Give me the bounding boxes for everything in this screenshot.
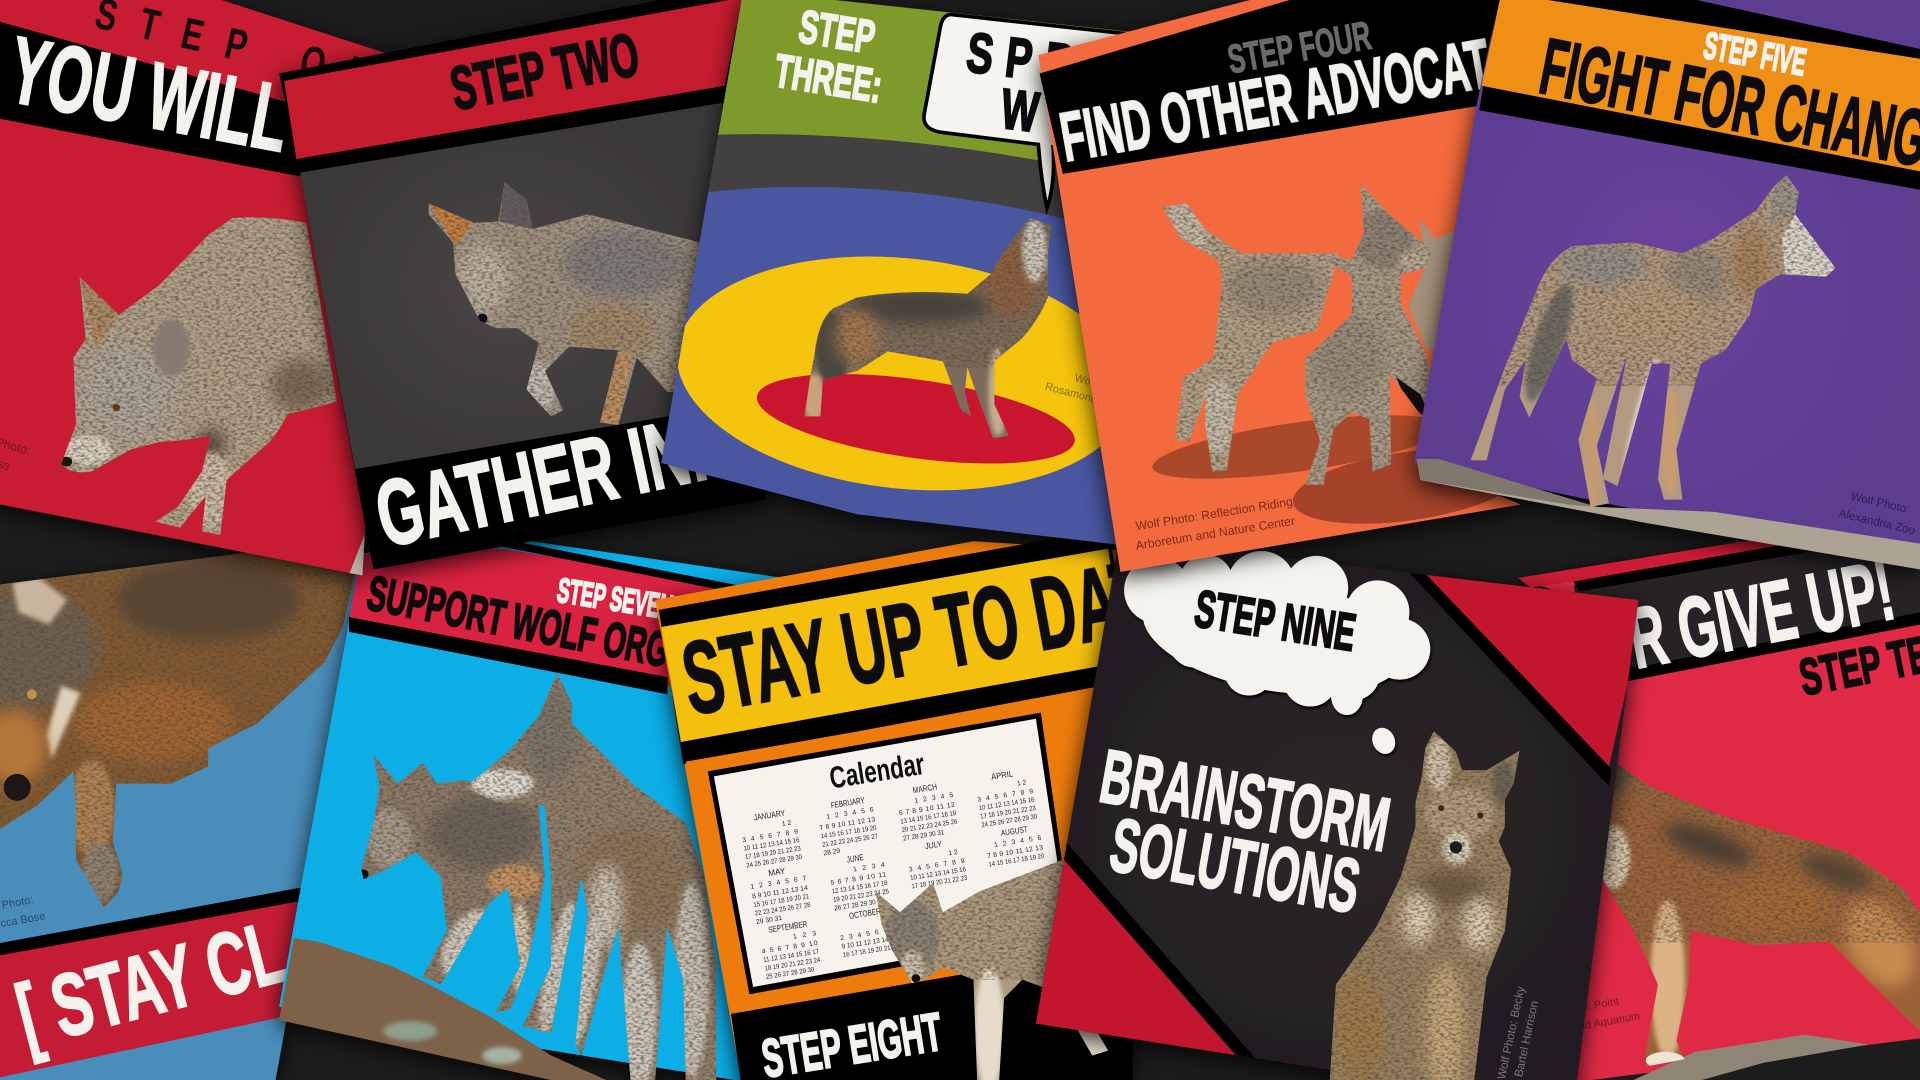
month: august: AUGUST xyxy=(1000,824,1029,838)
heading: solutions: SOLUTIONS xyxy=(1104,802,1366,930)
heading: gather info: GATHER INFO xyxy=(367,382,778,567)
wolf: step seven right xyxy=(463,671,720,1080)
month: february: 7 8 9 10 11 12 13 xyxy=(819,816,876,832)
calendar title: Calendar xyxy=(827,747,927,795)
ellipse: red xyxy=(752,358,1080,480)
heading: support wolf organizations: SUPPORT WOLF ORG xyxy=(363,566,674,678)
month: april: 3 4 5 6 7 8 9 xyxy=(977,788,1034,804)
thought bubble xyxy=(1124,551,1430,758)
month: august: 14 15 16 17 18 19 20 xyxy=(988,853,1045,869)
month: august: 7 8 9 10 11 12 13 xyxy=(987,844,1044,860)
month: july: 3 4 5 6 7 8 9 xyxy=(908,858,965,874)
month: july: 10 11 12 13 14 15 16 xyxy=(910,866,967,882)
band: black stripes xyxy=(659,529,1133,764)
month: june: 5 6 7 8 9 10 11 xyxy=(830,871,887,887)
month: june: 26 27 28 29 30 xyxy=(834,899,877,912)
band: orange panel xyxy=(686,683,1133,1014)
calendar xyxy=(708,713,1073,994)
month: july: 1 2 xyxy=(948,849,959,857)
month: september: SEPTEMBER xyxy=(768,919,808,935)
band: orange title xyxy=(1482,0,1920,171)
month: july: 17 18 19 20 21 22 23 xyxy=(911,875,968,891)
panel: step three, spread the word: Rosamond xyxy=(1044,381,1098,406)
month: may xyxy=(748,862,813,926)
month: may: 8 9 10 11 12 13 14 xyxy=(752,885,809,901)
month: may: 29 30 31 xyxy=(756,915,783,926)
panel: step two, gather info xyxy=(279,0,778,569)
heading: stay clear: [ STAY CL xyxy=(7,901,295,1065)
wolf: step four behind xyxy=(1157,196,1347,478)
month: january xyxy=(738,806,803,870)
month: january: 1 2 xyxy=(781,820,792,828)
panel: step nine, brainstorm solutions xyxy=(1016,527,1653,1080)
band: red title xyxy=(284,0,742,159)
photo credit xyxy=(1135,494,1296,553)
rock xyxy=(279,938,606,1080)
month: march: 6 7 8 9 10 11 12 xyxy=(899,801,956,817)
month: february: 1 2 3 4 5 6 xyxy=(826,806,874,821)
shadow ellipses xyxy=(1149,402,1528,536)
label: step seven: STEP SEVEN xyxy=(555,572,676,627)
month: june xyxy=(827,849,891,912)
month: may: 15 16 17 18 19 20 21 xyxy=(753,893,810,909)
month: january: 17 18 19 20 21 22 23 xyxy=(745,845,802,861)
month: september: 11 12 13 14 15 16 17 xyxy=(763,948,820,964)
band: red strip xyxy=(1518,514,1920,588)
wolf: step eight xyxy=(869,857,1114,1080)
wolf: step four third xyxy=(1408,218,1457,355)
month: march: MARCH xyxy=(912,782,938,795)
month: april: APRIL xyxy=(990,768,1014,782)
band: black stripe xyxy=(0,888,300,956)
month: may: 1 2 3 4 5 6 7 xyxy=(750,875,807,891)
heading: stay up to date: STAY UP TO DATE xyxy=(674,531,1197,737)
band: black footer xyxy=(731,945,1133,1080)
month: october: 2 3 4 5 6 7 8 xyxy=(840,926,897,942)
rock xyxy=(1633,1035,1869,1080)
leg fragment xyxy=(350,534,365,576)
month: september: 4 5 6 7 8 9 10 xyxy=(761,940,818,956)
photo credit: to: Point xyxy=(1578,996,1620,1014)
heading: brainstorm: BRAINSTORM xyxy=(1094,734,1396,868)
month: october: 16 17 18 19 20 21 22 xyxy=(843,943,899,959)
wolf: step five xyxy=(1467,171,1840,514)
month: april xyxy=(973,766,1038,829)
corner: red top right xyxy=(1426,575,1638,766)
month: february: 21 22 23 24 25 26 27 xyxy=(822,833,879,849)
panel background xyxy=(300,103,722,469)
photo credit: Photo: xyxy=(1,894,34,912)
month: february: FEBRUARY xyxy=(830,795,866,810)
month: october: 1 xyxy=(887,917,892,925)
band: black title xyxy=(1040,0,1509,174)
panel: step seven, support wolf organizations xyxy=(279,539,784,1080)
panel: step ten, never give up: and Aquarium xyxy=(1572,1010,1641,1034)
panel: step six, stay close xyxy=(0,552,356,1080)
month: june: 12 13 14 15 16 17 18 xyxy=(831,880,888,896)
month: july xyxy=(905,835,968,891)
band: green title xyxy=(716,0,1176,190)
band: yellow title xyxy=(661,549,1127,742)
month: april: 10 11 12 13 14 15 16 xyxy=(978,796,1035,812)
panel: step five, fight for change xyxy=(1414,0,1920,569)
month: september xyxy=(758,918,822,981)
photo credit: Wo xyxy=(1073,372,1092,388)
month: september: 1 2 3 xyxy=(793,930,817,941)
photo credit: Wolf Photo: Becky xyxy=(1495,985,1528,1080)
panel: step three, spread the word xyxy=(470,0,1391,598)
month: october: OCTOBER xyxy=(848,906,881,921)
month: august: 1 2 3 4 5 6 xyxy=(994,835,1042,849)
band: red title xyxy=(0,901,298,1078)
photo credit: Wolf Photo: Reflection Riding xyxy=(1135,494,1294,533)
month: april: 1 2 xyxy=(1017,779,1027,788)
month: may: MAY xyxy=(767,865,786,878)
month: october: 9 10 11 12 13 14 15 xyxy=(841,935,898,951)
month: march xyxy=(895,779,960,843)
ellipse: blue xyxy=(470,136,1391,598)
month: april: 17 18 19 20 21 22 23 xyxy=(980,805,1037,821)
month: april: 24 25 26 27 28 29 30 xyxy=(981,813,1038,829)
corner: red bottom left xyxy=(1036,860,1236,1056)
month: february: 28 29 xyxy=(823,848,841,857)
month: june: 1 2 3 4 xyxy=(853,862,885,874)
month: june: JUNE xyxy=(846,852,865,865)
wolf: step four front xyxy=(1298,181,1439,487)
month: march: 27 28 29 30 31 xyxy=(903,829,945,843)
photo credit: Arboretum and Nature Center xyxy=(1135,514,1296,553)
band: black stripes xyxy=(1479,0,1920,190)
photo credit: Alexandria Zoo xyxy=(1837,507,1916,537)
panel: step one, you will xyxy=(0,0,386,596)
label: step three: THREE: xyxy=(771,44,886,112)
month: september: 18 19 20 21 22 23 24 xyxy=(764,957,821,973)
speech bubble xyxy=(924,15,1211,208)
wolf: step one xyxy=(55,208,343,539)
month: march: 1 2 3 4 5 xyxy=(914,792,954,805)
ellipse: yellow xyxy=(665,235,1142,512)
month: february: 14 15 16 17 18 19 20 xyxy=(820,825,877,840)
month: january: JANUARY xyxy=(753,808,786,823)
wolf: step ten xyxy=(1602,764,1920,1066)
panel: step nine, brainstorm solutions: Bartel Harrison xyxy=(1512,1000,1541,1078)
panel: step eight, stay up to date xyxy=(655,529,1197,1080)
band: dark title xyxy=(1573,529,1920,680)
month: june: 19 20 21 22 23 24 25 xyxy=(833,888,890,904)
wolf: step seven left xyxy=(361,756,545,1013)
month: august xyxy=(983,822,1045,869)
month: january: 3 4 5 6 7 8 9 xyxy=(742,828,799,844)
wolf: step nine xyxy=(1329,729,1524,1080)
month: september: 25 26 27 28 29 30 xyxy=(765,966,815,981)
bubble text: SPREAD xyxy=(963,22,1211,113)
band: black title xyxy=(0,18,306,178)
card bottom edge xyxy=(1592,1038,1920,1080)
label: step three xyxy=(771,0,886,112)
label: step nine: STEP NINE xyxy=(1191,579,1360,663)
photo credit: Wolf Photo: xyxy=(1850,490,1911,516)
label: step five: STEP FIVE xyxy=(1700,25,1809,84)
panel: step ten, never give up xyxy=(1518,514,1920,1080)
wolf: step two xyxy=(422,178,704,429)
month: march: 13 14 15 16 17 18 19 xyxy=(900,810,957,826)
speech bubble: WORD xyxy=(998,78,1180,161)
panel: step four, find other advocates xyxy=(1038,0,1528,572)
band: red title xyxy=(349,549,735,688)
heading: you will: YOU WILL xyxy=(1,17,297,171)
month: january: 10 11 12 13 14 15 16 xyxy=(743,837,800,853)
photo credit xyxy=(1837,490,1916,537)
month: july: JULY xyxy=(924,839,943,851)
month: march: 20 21 22 23 24 25 26 xyxy=(901,818,958,834)
month: may: 22 23 24 25 26 27 28 xyxy=(754,902,811,917)
wolf: step three xyxy=(802,214,1059,441)
month: january: 24 25 26 27 28 29 30 xyxy=(746,854,803,870)
label: step three: STEP xyxy=(796,0,879,63)
wolf: step six xyxy=(0,539,361,912)
month: october xyxy=(836,904,899,959)
rock xyxy=(1417,459,1920,569)
month: february xyxy=(815,794,880,857)
